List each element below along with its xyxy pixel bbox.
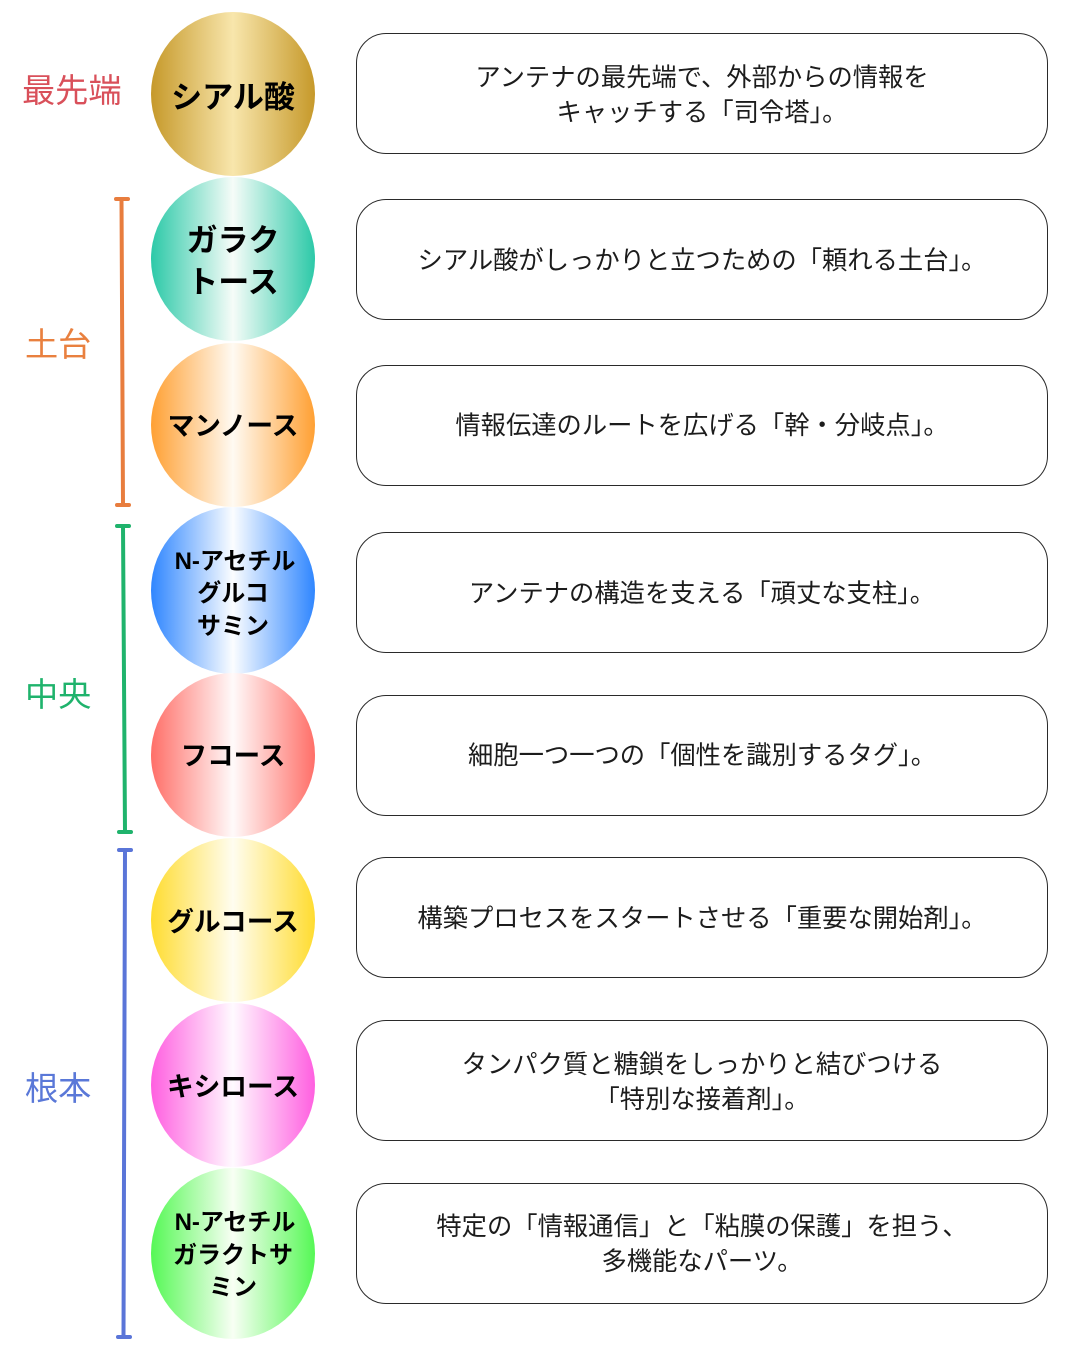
panel: N-アセチルガラクトサミン description: 多機能なパーツ。: [601, 1248, 803, 1276]
circle: フコース: フコース: [181, 741, 285, 771]
panel: グルコース description: 構築プロセスをスタートさせる「重要な開始剤」。: [417, 905, 987, 933]
label: 根本: 根本: [25, 1071, 91, 1108]
circle: フコース: [151, 673, 315, 837]
panel: マンノース description: [356, 365, 1048, 486]
circle: シアル酸: シアル酸: [171, 80, 295, 114]
label: 中央: 中央: [25, 677, 91, 714]
circle: N-アセチルガラクトサミン: ミン: [209, 1274, 257, 1301]
panel: マンノース description: 情報伝達のルートを広げる「幹・分岐点」。: [455, 412, 949, 440]
brackets: [114, 197, 133, 1339]
circle: N-アセチルグルコサミン: N-アセチル: [175, 548, 295, 575]
circle: キシロース: [151, 1003, 315, 1167]
panel: キシロース description: タンパク質と糖鎖をしっかりと結びつける: [462, 1050, 942, 1078]
circle: シアル酸: [151, 12, 315, 176]
panel: N-アセチルグルコサミン description: [356, 532, 1048, 653]
panel: シアル酸 description: [356, 33, 1048, 154]
panel: N-アセチルガラクトサミン description: 特定の「情報通信」と「粘膜の保護」を担う、: [436, 1212, 968, 1240]
label: 最先端: 最先端: [22, 73, 122, 110]
label: 土台: 土台: [25, 327, 91, 364]
circle: マンノース: [151, 343, 315, 507]
circle: N-アセチルグルコサミン: サミン: [197, 613, 269, 640]
panel: フコース description: 細胞一つ一つの「個性を識別するタグ」。: [468, 742, 936, 770]
circle: マンノース: マンノース: [168, 411, 298, 441]
panel: ガラクトース description: [356, 199, 1048, 320]
panel: グルコース description: [356, 857, 1048, 978]
circle: ガラクトース: ガラク: [186, 222, 280, 258]
panel: キシロース description: [356, 1020, 1048, 1141]
panel: N-アセチルガラクトサミン description: [356, 1183, 1048, 1304]
circle: N-アセチルガラクトサミン: ガラクトサ: [173, 1242, 293, 1269]
panel: N-アセチルグルコサミン description: アンテナの構造を支える「頑丈な支柱」。: [469, 580, 935, 608]
circle: N-アセチルガラクトサミン: [151, 1168, 315, 1339]
panel: シアル酸 description: アンテナの最先端で、外部からの情報を: [475, 64, 929, 92]
circle: キシロース: キシロース: [167, 1072, 299, 1102]
panel: キシロース description: 「特別な接着剤」。: [594, 1086, 810, 1114]
circle: グルコース: グルコース: [167, 906, 299, 936]
circle: N-アセチルグルコサミン: グルコ: [197, 580, 269, 607]
panel: シアル酸 description: キャッチする「司令塔」。: [557, 98, 847, 126]
circle: ガラクトース: [151, 177, 315, 341]
panel: フコース description: [356, 695, 1048, 816]
circle: グルコース: [151, 838, 315, 1002]
circle: N-アセチルガラクトサミン: N-アセチル: [175, 1209, 295, 1236]
circle: ガラクトース: トース: [187, 264, 279, 300]
circle: N-アセチルグルコサミン: [151, 507, 315, 674]
panel: ガラクトース description: シアル酸がしっかりと立つための「頼れる土台」。: [418, 247, 986, 275]
